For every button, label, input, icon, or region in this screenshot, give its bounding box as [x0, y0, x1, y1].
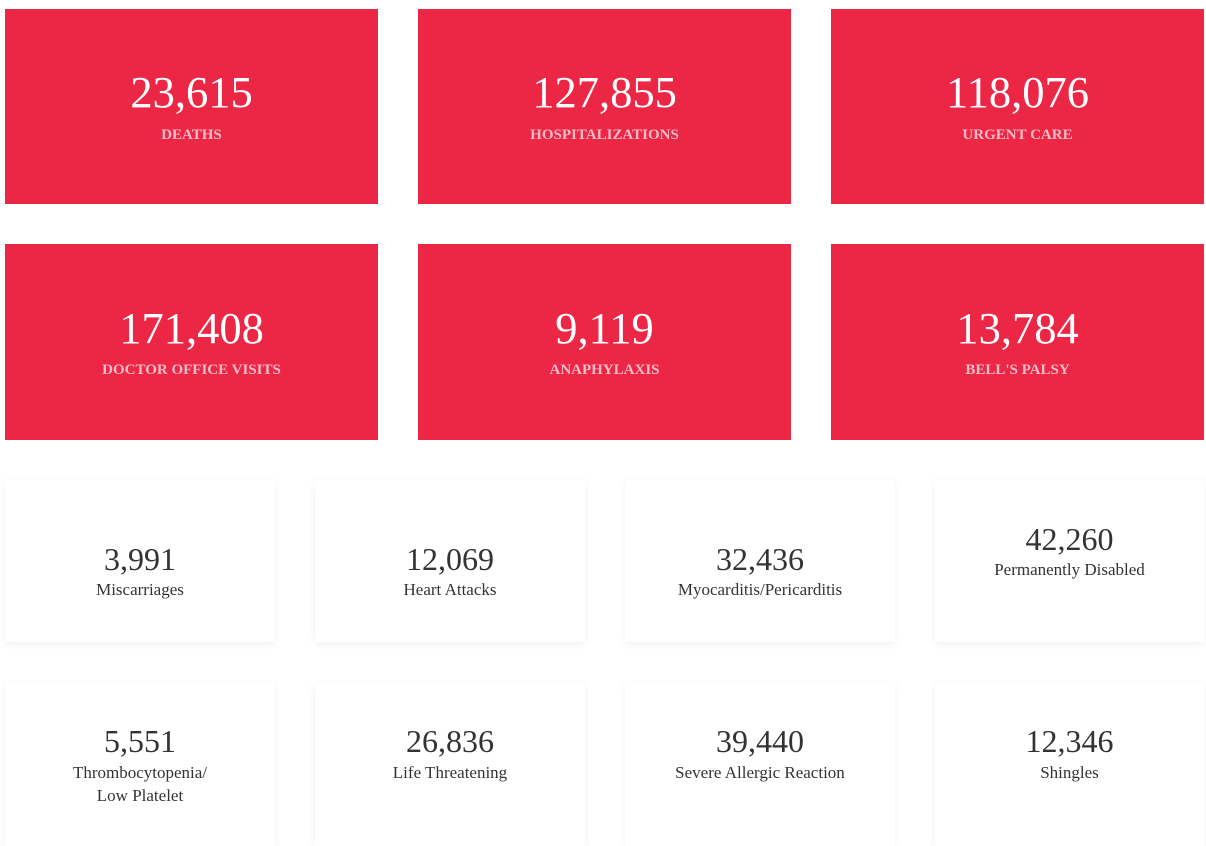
panel: heart attacks: Heart Attacks — [404, 580, 496, 599]
panel: severe allergic reaction: 39,440 — [716, 723, 804, 759]
panel: severe allergic reaction: Severe Allergic Reaction — [675, 763, 845, 782]
panel: anaphylaxis — [418, 244, 791, 440]
panel: miscarriages: Miscarriages — [96, 580, 184, 599]
panel: myocarditis/pericarditis — [625, 480, 895, 642]
panel: bell's palsy: 13,784 — [956, 303, 1079, 353]
panel: miscarriages — [5, 480, 275, 642]
panel: deaths — [5, 9, 378, 204]
panel: myocarditis/pericarditis: Myocarditis/Pericarditis — [678, 580, 842, 599]
panel: life threatening: 26,836 — [406, 723, 494, 759]
panel: heart attacks — [315, 480, 585, 642]
panel: thrombocytopenia: Low Platelet — [97, 786, 183, 805]
panel: shingles: Shingles — [1040, 763, 1099, 782]
panel: thrombocytopenia — [5, 683, 275, 846]
panel: life threatening — [315, 683, 585, 846]
panel: urgent care: URGENT CARE — [962, 127, 1073, 143]
panel: severe allergic reaction — [625, 683, 895, 846]
panel: thrombocytopenia: 5,551 — [104, 723, 176, 759]
panel: urgent care: 118,076 — [946, 67, 1089, 117]
panel: life threatening: Life Threatening — [393, 763, 507, 782]
panel: doctor office visits — [5, 244, 378, 440]
panel: permanently disabled: Permanently Disabled — [994, 560, 1145, 579]
panel: hospitalizations — [418, 9, 791, 204]
panel: miscarriages: 3,991 — [104, 541, 176, 577]
panel: hospitalizations: HOSPITALIZATIONS — [530, 127, 679, 143]
panel: doctor office visits: 171,408 — [119, 303, 264, 353]
panel: anaphylaxis: 9,119 — [555, 303, 654, 353]
panel: thrombocytopenia: Thrombocytopenia/ — [73, 763, 207, 782]
panel: bell's palsy: BELL'S PALSY — [965, 362, 1070, 378]
panel: myocarditis/pericarditis: 32,436 — [716, 541, 804, 577]
panel: doctor office visits: DOCTOR OFFICE VISITS — [102, 362, 281, 378]
panel: deaths: 23,615 — [130, 67, 253, 117]
panel: permanently disabled — [935, 480, 1204, 642]
panel: hospitalizations: 127,855 — [532, 67, 677, 117]
panel: heart attacks: 12,069 — [406, 541, 494, 577]
panel: shingles: 12,346 — [1026, 723, 1114, 759]
panel: deaths: DEATHS — [161, 127, 222, 143]
panel: shingles — [935, 683, 1204, 846]
panel: permanently disabled: 42,260 — [1026, 521, 1114, 557]
panel: urgent care — [831, 9, 1204, 204]
panel: bell's palsy — [831, 244, 1204, 440]
panel: anaphylaxis: ANAPHYLAXIS — [549, 362, 660, 378]
